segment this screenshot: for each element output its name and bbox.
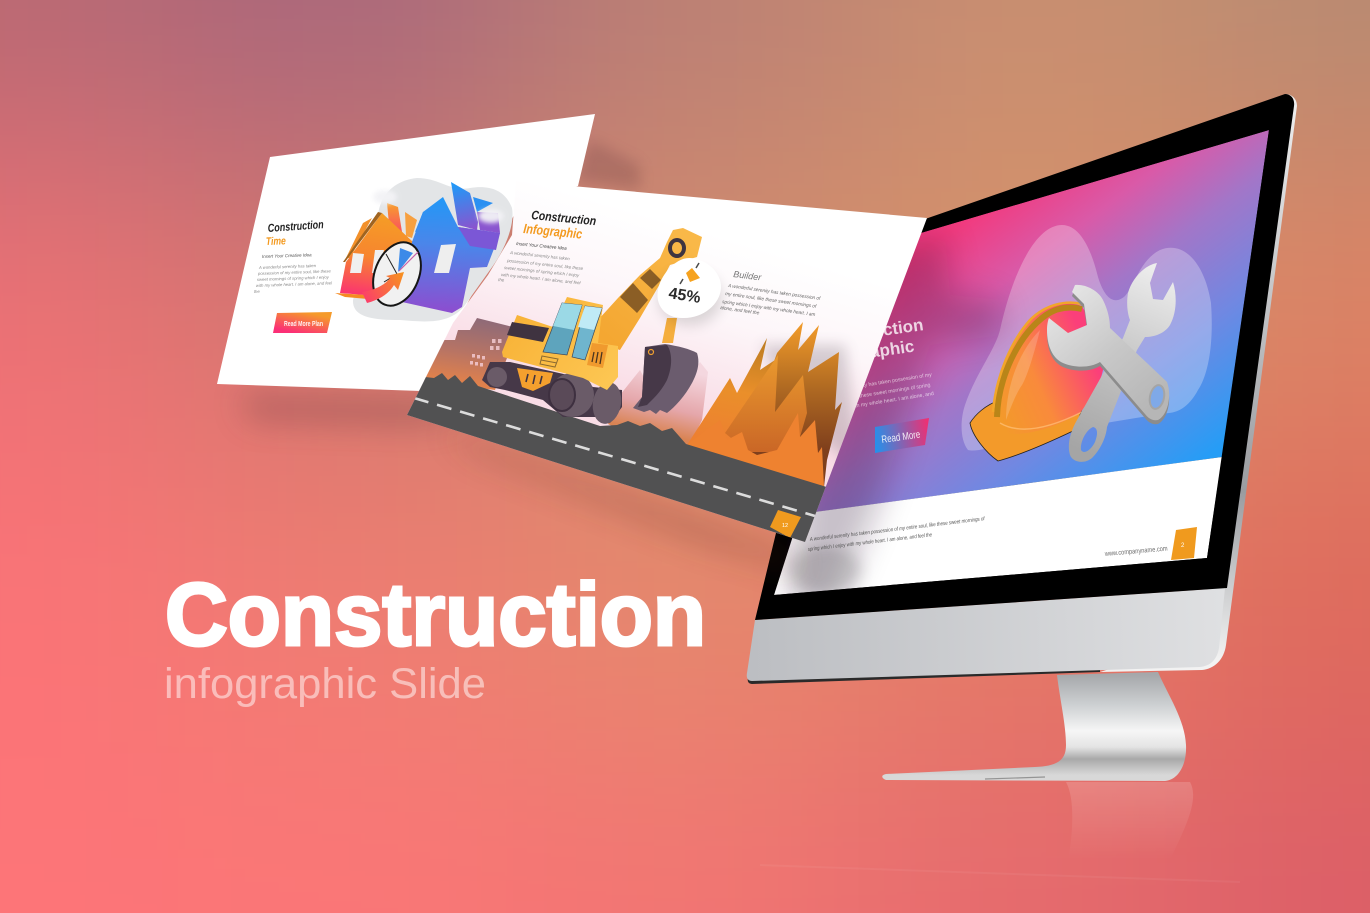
arm brown band xyxy=(640,269,661,289)
orange chimney back xyxy=(405,212,417,238)
engine vent xyxy=(592,352,602,364)
bucket body xyxy=(633,344,698,414)
slide 2 paragraph: sweet mornings of spring which I enjoy xyxy=(504,265,580,278)
read more button: Read More xyxy=(881,429,921,446)
slide 2 title: Construction xyxy=(531,208,597,228)
slide 1: Construction Time xyxy=(217,114,595,391)
builder paragraph: alone, and feel the xyxy=(720,305,760,317)
screen heading xyxy=(874,320,923,360)
page number box xyxy=(770,510,801,538)
middle mountains xyxy=(725,355,807,452)
helmet dome xyxy=(993,304,1103,434)
orange house xyxy=(340,213,413,297)
slide 2 paragraph: the xyxy=(498,277,505,283)
slide 1 button xyxy=(273,312,332,333)
bucket xyxy=(633,344,698,414)
slide 2: Construction Infographic xyxy=(400,181,927,550)
arm brown band two xyxy=(620,283,648,313)
cloud puffs xyxy=(373,190,504,223)
screen paragraph: A wonderful serenity has taken possession of my xyxy=(821,372,933,396)
blue house back roof xyxy=(415,210,432,232)
road centre line xyxy=(414,398,815,516)
screen website text: www.companyname.com xyxy=(1104,546,1168,558)
excavator xyxy=(482,228,702,426)
silver chin xyxy=(747,588,1225,681)
blob shapes xyxy=(962,225,1212,451)
house illustration xyxy=(335,178,513,321)
screen heading: Infographic xyxy=(821,337,915,368)
monitor stand reflection xyxy=(1066,782,1193,860)
badge icon xyxy=(680,263,700,284)
orange back roof xyxy=(346,218,372,258)
back wrench xyxy=(1069,263,1176,462)
dark engine panel xyxy=(507,322,549,342)
slide 2 title: Infographic xyxy=(523,221,583,242)
main title: Construction xyxy=(165,564,706,664)
clock face xyxy=(364,235,430,313)
slide 1 shadow xyxy=(240,395,470,425)
excavator body xyxy=(502,297,618,390)
orange roof edge xyxy=(343,212,382,262)
blue house right wing xyxy=(458,227,500,250)
slide 1 panel xyxy=(217,114,595,391)
page number box: 2 xyxy=(1181,543,1185,549)
screen caption text xyxy=(808,516,985,553)
engine vent panel xyxy=(587,343,608,368)
background city right xyxy=(608,358,708,445)
builder paragraph xyxy=(720,283,821,318)
helmet brim xyxy=(970,400,1085,461)
subtitle: infographic Slide xyxy=(164,660,486,708)
back right mountains xyxy=(752,322,842,486)
slide 2 panel xyxy=(407,181,927,542)
helmet xyxy=(970,303,1103,461)
slide 2 paragraph: A wonderful serenity has taken xyxy=(509,250,571,261)
stand xyxy=(882,672,1186,781)
helmet outer rim xyxy=(993,303,1082,412)
steps xyxy=(540,356,558,367)
left house window two xyxy=(372,250,384,273)
cab window 2 xyxy=(572,306,602,360)
clock hands xyxy=(384,254,397,282)
road surface xyxy=(400,373,830,550)
slide 1 paragraph: with my whole heart. I am alone, and feel xyxy=(256,280,333,288)
slide 1 paragraph xyxy=(254,263,333,294)
clock base xyxy=(335,293,368,299)
monitor xyxy=(747,94,1297,860)
bucket pin xyxy=(648,350,654,354)
blue back chimney xyxy=(473,197,493,212)
bucket side xyxy=(638,345,671,407)
road xyxy=(400,373,830,550)
left house window xyxy=(350,253,364,273)
shadow cast by slide on screen xyxy=(790,235,1000,620)
page number box xyxy=(1171,527,1197,560)
slide 1 title: Time xyxy=(266,235,286,248)
black bezel xyxy=(755,94,1294,620)
tracks xyxy=(482,362,622,423)
slide 1 shadow upper xyxy=(575,140,640,190)
mid track band xyxy=(550,373,594,417)
helmet gloss xyxy=(1006,330,1040,420)
cab window 1 top xyxy=(553,303,582,330)
bucket stick xyxy=(662,318,677,343)
read more button xyxy=(875,418,929,453)
excavator arm xyxy=(597,228,702,350)
clock magenta line xyxy=(399,252,418,271)
slide 2 shadow xyxy=(440,430,800,570)
slide 1 paragraph: sweet mornings of spring which I enjoy xyxy=(257,274,330,282)
cab window 1 xyxy=(543,303,582,355)
screen heading: Construction xyxy=(817,315,925,349)
front wrench ring hole xyxy=(1148,384,1166,410)
shadow on white panel xyxy=(789,546,861,594)
percentage badge xyxy=(657,258,722,325)
grey blob xyxy=(353,178,513,321)
slide 2 paragraph: possession of my entire soul, like these xyxy=(506,258,584,271)
slide 2 paragraph: with my whole heart. I am alone, and feel xyxy=(501,272,582,285)
cab window 2 top xyxy=(578,306,602,330)
slide 1 title: Construction xyxy=(267,219,324,235)
screen xyxy=(774,130,1269,620)
front wrench xyxy=(1047,285,1169,424)
screen lower white panel xyxy=(774,457,1222,595)
clock arrow xyxy=(362,272,404,303)
slide 1 button: Read More Plan xyxy=(284,319,323,328)
metal edge xyxy=(1100,94,1297,672)
badge shadow xyxy=(658,271,722,325)
stand base streak xyxy=(985,777,1045,779)
arm joint ring xyxy=(670,240,684,256)
page number box: 12 xyxy=(782,523,788,529)
left mountains xyxy=(687,338,775,455)
helmet ridge xyxy=(997,307,1082,417)
front mountains xyxy=(687,413,824,487)
slide 2 title xyxy=(523,208,597,242)
helmet brim highlight xyxy=(1000,412,1082,429)
faint horizon line xyxy=(760,865,1240,882)
builder paragraph: spring which I enjoy with my whole heart. I am xyxy=(722,299,816,318)
screen gradient xyxy=(816,130,1269,512)
front wrench depth xyxy=(1047,289,1169,424)
slide 2 subtitle: Insert Your Creative Idea xyxy=(516,241,567,251)
screen paragraph: which I enjoy with my whole heart. I am alone, and xyxy=(819,391,934,415)
front wheel xyxy=(590,380,624,426)
screen paragraph xyxy=(856,373,934,408)
badge circle xyxy=(657,258,721,318)
mid wheel xyxy=(549,379,575,411)
city windows xyxy=(470,339,502,366)
slide 2 paragraph xyxy=(498,250,584,285)
orange chimney xyxy=(387,203,403,238)
blue house window xyxy=(434,244,456,273)
clock xyxy=(335,235,430,313)
blue house xyxy=(402,197,500,313)
purple block xyxy=(477,212,500,233)
tall chimney xyxy=(451,182,478,230)
builder paragraph: my entire soul, like these sweet mornings of xyxy=(725,291,817,310)
builder paragraph: A wonderful serenity has taken possession of xyxy=(727,283,821,302)
rear wheel xyxy=(487,367,507,387)
slide 1 title xyxy=(266,219,324,248)
chin underside line xyxy=(748,670,1100,684)
mountain shadow xyxy=(760,345,860,470)
badge value: 45% xyxy=(667,285,702,307)
screen caption text: A wonderful serenity has taken possession of my entire soul, like these sweet mornings of xyxy=(809,516,985,543)
grille lines xyxy=(526,374,542,384)
screen paragraph: soul, like these sweet mornings of spring xyxy=(838,382,931,403)
grille xyxy=(517,368,553,391)
slide 1 paragraph: the xyxy=(254,289,261,294)
slide 1 paragraph: A wonderful serenity has taken xyxy=(258,263,317,270)
builder heading: Builder xyxy=(733,269,763,283)
background city left xyxy=(420,318,513,390)
screen caption text: spring which I enjoy with my whole heart. I am alone, and feel the xyxy=(808,532,932,553)
mountains xyxy=(687,322,860,487)
clock sector xyxy=(398,248,413,272)
slide 1 subtitle: Insert Your Creative Idea xyxy=(262,252,312,259)
front wrench body xyxy=(1047,285,1169,420)
slide 1 paragraph: possession of my entire soul, like these xyxy=(257,268,332,276)
